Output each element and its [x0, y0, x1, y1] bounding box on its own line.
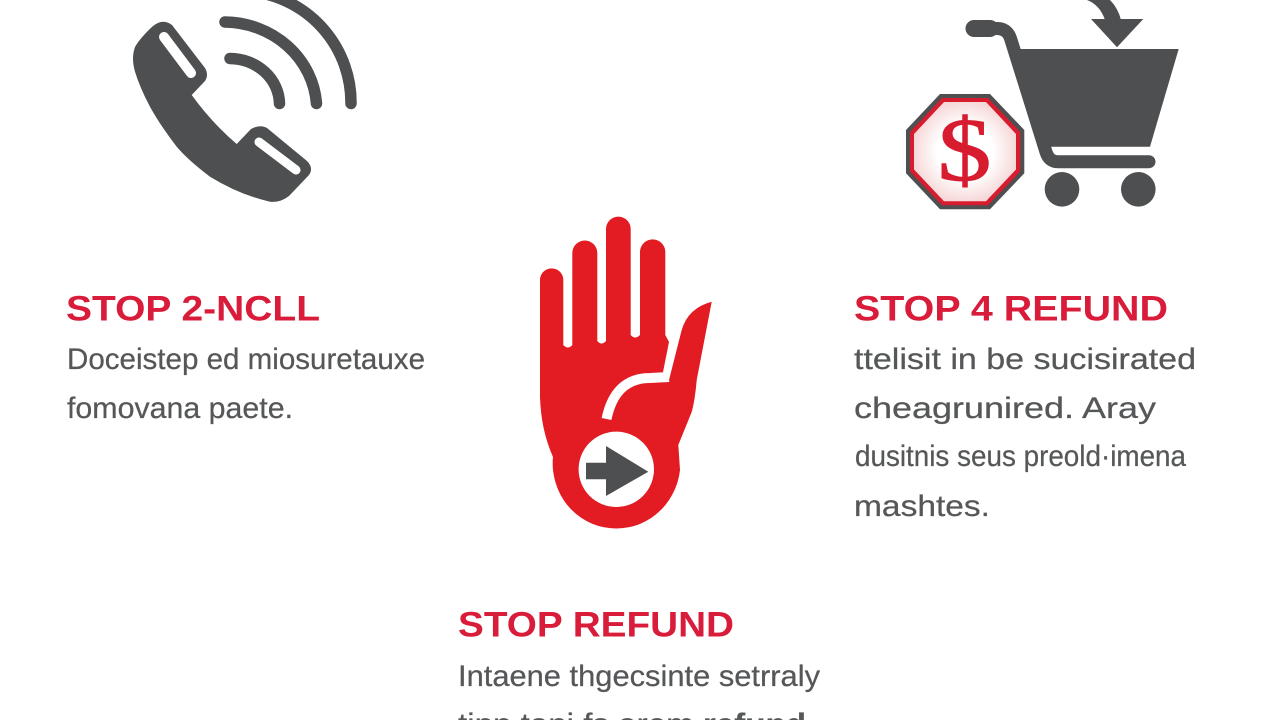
body: centre: Intaene thgecsinte setrraly: [458, 660, 820, 693]
body: centre: [458, 660, 820, 720]
wrist circle: [553, 402, 679, 528]
body: left: fomovana paete.: [67, 392, 293, 425]
icon: shopping cart with stop-dollar sign: [906, 0, 1179, 209]
body: left: Doceistep ed miosuretauxe: [67, 343, 425, 376]
text block: right step: [854, 288, 1196, 523]
signal arcs: [225, 0, 351, 104]
body: right: mashtes.: [854, 490, 990, 523]
heading: right: STOP 4 REFUND: [854, 288, 1168, 328]
body: right: [854, 343, 1196, 523]
handset: [133, 22, 311, 202]
arrow: [586, 446, 648, 496]
text block: left step: [66, 288, 425, 425]
arrow into cart: [1087, 0, 1143, 47]
body: right: ttelisit in be sucisirated: [854, 343, 1196, 376]
body: left: [67, 343, 425, 425]
palm crease: [606, 377, 669, 419]
body: right: cheagrunired. Aray: [854, 392, 1156, 425]
stop sign with dollar: [906, 94, 1024, 209]
text block: centre step: [458, 604, 820, 720]
cart: [974, 28, 1179, 207]
body: right: dusitnis seus preold·imena: [855, 440, 1186, 473]
hand: [540, 217, 712, 527]
icon: phone handset with signal arcs: [133, 0, 351, 202]
heading: left: STOP 2-NCLL: [66, 288, 320, 328]
icon: red stop hand with arrow: [540, 217, 712, 528]
stop sign with dollar: $: [938, 99, 991, 200]
heading: centre: STOP REFUND: [458, 604, 734, 644]
white circle: [579, 432, 654, 507]
